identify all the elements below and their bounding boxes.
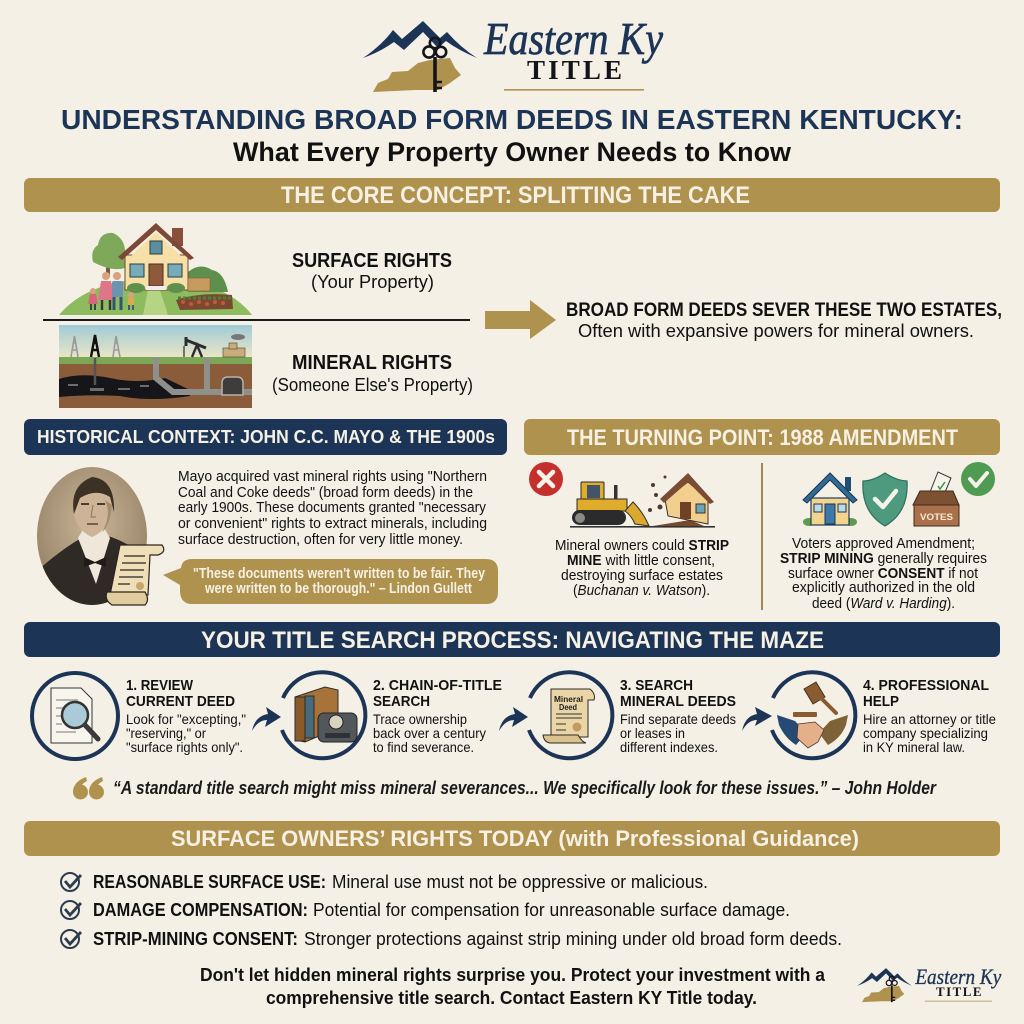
text block: after amendment: STRIP MINING generally requires bbox=[780, 550, 987, 567]
step 1: review current deed bbox=[32, 673, 246, 759]
brand script: Eastern Ky bbox=[483, 13, 664, 64]
text block: after amendment bbox=[780, 535, 987, 612]
call to action bbox=[200, 965, 826, 1008]
icon: document and magnifier bbox=[51, 688, 98, 743]
brand title word: TITLE bbox=[527, 55, 622, 85]
icon: house, shield and ballot box bbox=[803, 472, 959, 526]
item: damage compensation: DAMAGE COMPENSATION: bbox=[93, 900, 308, 920]
item: strip-mining consent: STRIP-MINING CONSENT: bbox=[93, 929, 298, 949]
truck bbox=[223, 334, 245, 357]
banner: the core concept: THE CORE CONCEPT: SPLITTING THE CAKE bbox=[281, 182, 750, 209]
statement: severance bbox=[566, 300, 1002, 341]
step 3: search mineral deeds: different indexes. bbox=[620, 739, 718, 755]
step 2: chain-of-title search: SEARCH bbox=[373, 693, 430, 710]
step 1: review current deed: "surface rights only". bbox=[126, 739, 243, 755]
icon: gavel and handshake bbox=[777, 682, 848, 748]
text block: before amendment: MINE with little consent, bbox=[567, 552, 715, 569]
text block: Mayo history: surface destruction, often for very little money. bbox=[178, 531, 463, 548]
small footer logo: TITLE bbox=[936, 984, 982, 999]
item: strip-mining consent: Stronger protections against strip mining under old broad form deeds. bbox=[304, 929, 842, 949]
step 4: professional help: 4. PROFESSIONAL bbox=[863, 677, 989, 694]
illustration: mineral rights cross-section bbox=[59, 325, 252, 408]
text block: before amendment: (Buchanan v. Watson). bbox=[573, 582, 710, 599]
text block: Mayo history: early 1900s. These documents granted "necessary bbox=[178, 499, 486, 516]
text block: before amendment: Mineral owners could STRIP bbox=[555, 537, 729, 554]
label: mineral rights: (Someone Else's Property) bbox=[272, 375, 473, 395]
icon: mineral deed scroll: Deed bbox=[559, 703, 577, 712]
banner: turning point bbox=[524, 419, 1000, 455]
banner: title search process bbox=[24, 622, 1000, 657]
step 3: search mineral deeds: MINERAL DEEDS bbox=[620, 693, 736, 710]
step 4: professional help: company specializing bbox=[863, 725, 988, 741]
label: surface rights: SURFACE RIGHTS bbox=[292, 250, 452, 272]
icon: mineral deed scroll bbox=[543, 689, 594, 743]
item: damage compensation: Potential for compensation for unreasonable surface damage. bbox=[313, 900, 790, 920]
item: reasonable surface use bbox=[61, 872, 708, 892]
step 2: chain-of-title search: 2. CHAIN-OF-TITLE bbox=[373, 677, 502, 694]
banner: historical context: HISTORICAL CONTEXT: JOHN C.C. MAYO & THE 1900s bbox=[37, 426, 495, 447]
step 4: professional help: Hire an attorney or title bbox=[863, 711, 996, 727]
icon: books and stamp bbox=[295, 687, 357, 742]
arrow: to severance statement bbox=[485, 300, 556, 339]
list: surface owner rights bbox=[61, 872, 842, 949]
callout: Lindon Gullett quote bbox=[163, 559, 498, 604]
arrow: step 3 to 4 bbox=[742, 707, 772, 731]
illustration: surface property bbox=[59, 223, 252, 315]
text block: Mayo history bbox=[178, 468, 487, 548]
text block: before amendment bbox=[555, 537, 729, 599]
banner: historical context bbox=[24, 419, 507, 455]
item: reasonable surface use: Mineral use must not be oppressive or malicious. bbox=[332, 872, 708, 892]
logo: Eastern KY Title bbox=[363, 13, 664, 92]
step 4: professional help: in KY mineral law. bbox=[863, 739, 965, 755]
portrait: John C.C. Mayo bbox=[30, 467, 164, 610]
text block: Mayo history: Mayo acquired vast mineral rights using "Northern bbox=[178, 468, 487, 485]
step 1: review current deed: Look for "excepting," bbox=[126, 711, 246, 727]
document scroll bbox=[106, 545, 164, 605]
step 1: review current deed: "reserving," or bbox=[126, 725, 206, 741]
oil derricks bbox=[71, 335, 120, 357]
icon: green check bbox=[961, 462, 995, 496]
label: mineral rights: MINERAL RIGHTS bbox=[292, 352, 452, 374]
family bbox=[88, 272, 134, 310]
item: reasonable surface use: REASONABLE SURFACE USE: bbox=[93, 872, 326, 892]
text block: after amendment: explicitly authorized in the old bbox=[792, 579, 975, 596]
callout: Lindon Gullett quote: were written to be thorough." – Lindon Gullett bbox=[204, 581, 472, 597]
text block: before amendment: destroying surface estates bbox=[561, 567, 723, 584]
icon: quotation mark bbox=[73, 777, 104, 800]
step 2: chain-of-title search: back over a century bbox=[373, 725, 486, 741]
step 3: search mineral deeds: 3. SEARCH bbox=[620, 677, 693, 694]
step 4: professional help: HELP bbox=[863, 693, 899, 710]
icon: mineral deed scroll: Mineral bbox=[554, 695, 583, 704]
step 3: search mineral deeds bbox=[529, 672, 736, 758]
icon: Kentucky silhouette bbox=[373, 58, 461, 92]
small footer logo: Eastern Ky bbox=[914, 964, 1001, 989]
call to action: Don't let hidden mineral rights surprise you. Protect your investment with a bbox=[200, 965, 826, 985]
icon: red X bbox=[529, 462, 563, 496]
item: damage compensation bbox=[61, 900, 790, 920]
label: mineral rights bbox=[272, 352, 473, 395]
banner: title search process: YOUR TITLE SEARCH PROCESS: NAVIGATING THE MAZE bbox=[201, 627, 824, 654]
banner: the core concept bbox=[24, 178, 1000, 212]
subtitle: What Every Property Owner Needs to Know bbox=[233, 137, 792, 167]
step 2: chain-of-title search: Trace ownership bbox=[373, 711, 467, 727]
step 4: professional help bbox=[772, 672, 996, 758]
label: surface rights bbox=[292, 250, 452, 292]
small footer logo bbox=[857, 964, 1001, 1002]
text block: after amendment: deed (Ward v. Harding). bbox=[812, 595, 955, 612]
item: strip-mining consent bbox=[61, 929, 842, 949]
title bbox=[61, 104, 963, 167]
icon: mountains bbox=[363, 21, 477, 58]
text block: after amendment: Voters approved Amendment; bbox=[792, 535, 975, 552]
statement: severance: Often with expansive powers for mineral owners. bbox=[578, 321, 974, 341]
banner: surface owners' rights bbox=[24, 821, 1000, 856]
step 1: review current deed: CURRENT DEED bbox=[126, 693, 235, 710]
step 2: chain-of-title search: to find severance. bbox=[373, 739, 474, 755]
icon: bulldozer hitting house bbox=[570, 473, 715, 528]
banner: surface owners' rights: SURFACE OWNERS’ RIGHTS TODAY (with Professional Guidance) bbox=[171, 826, 859, 851]
banner: turning point: THE TURNING POINT: 1988 AMENDMENT bbox=[567, 425, 958, 450]
arrow: step 1 to 2 bbox=[252, 707, 281, 731]
step 3: search mineral deeds: or leases in bbox=[620, 725, 685, 741]
step 1: review current deed: 1. REVIEW bbox=[126, 677, 194, 694]
text block: Mayo history: or convenient" rights to extract minerals, including bbox=[178, 515, 487, 532]
call to action: comprehensive title search. Contact Eastern KY Title today. bbox=[266, 988, 757, 1008]
icon: house, shield and ballot box: VOTES bbox=[920, 512, 953, 523]
callout: Lindon Gullett quote: "These documents weren't written to be fair. They bbox=[193, 566, 485, 582]
step 2: chain-of-title search bbox=[282, 672, 502, 758]
step 3: search mineral deeds: Find separate deeds bbox=[620, 711, 736, 727]
text block: after amendment: surface owner CONSENT if not bbox=[788, 565, 979, 582]
icon: skeleton key bbox=[423, 38, 446, 92]
text block: Mayo history: Coal and Coke deeds" (broad form deeds) in the bbox=[178, 484, 473, 501]
title: UNDERSTANDING BROAD FORM DEEDS IN EASTERN KENTUCKY: bbox=[61, 104, 963, 135]
pumpjack bbox=[184, 337, 206, 357]
arrow: step 2 to 3 bbox=[499, 707, 528, 731]
label: surface rights: (Your Property) bbox=[311, 272, 434, 292]
